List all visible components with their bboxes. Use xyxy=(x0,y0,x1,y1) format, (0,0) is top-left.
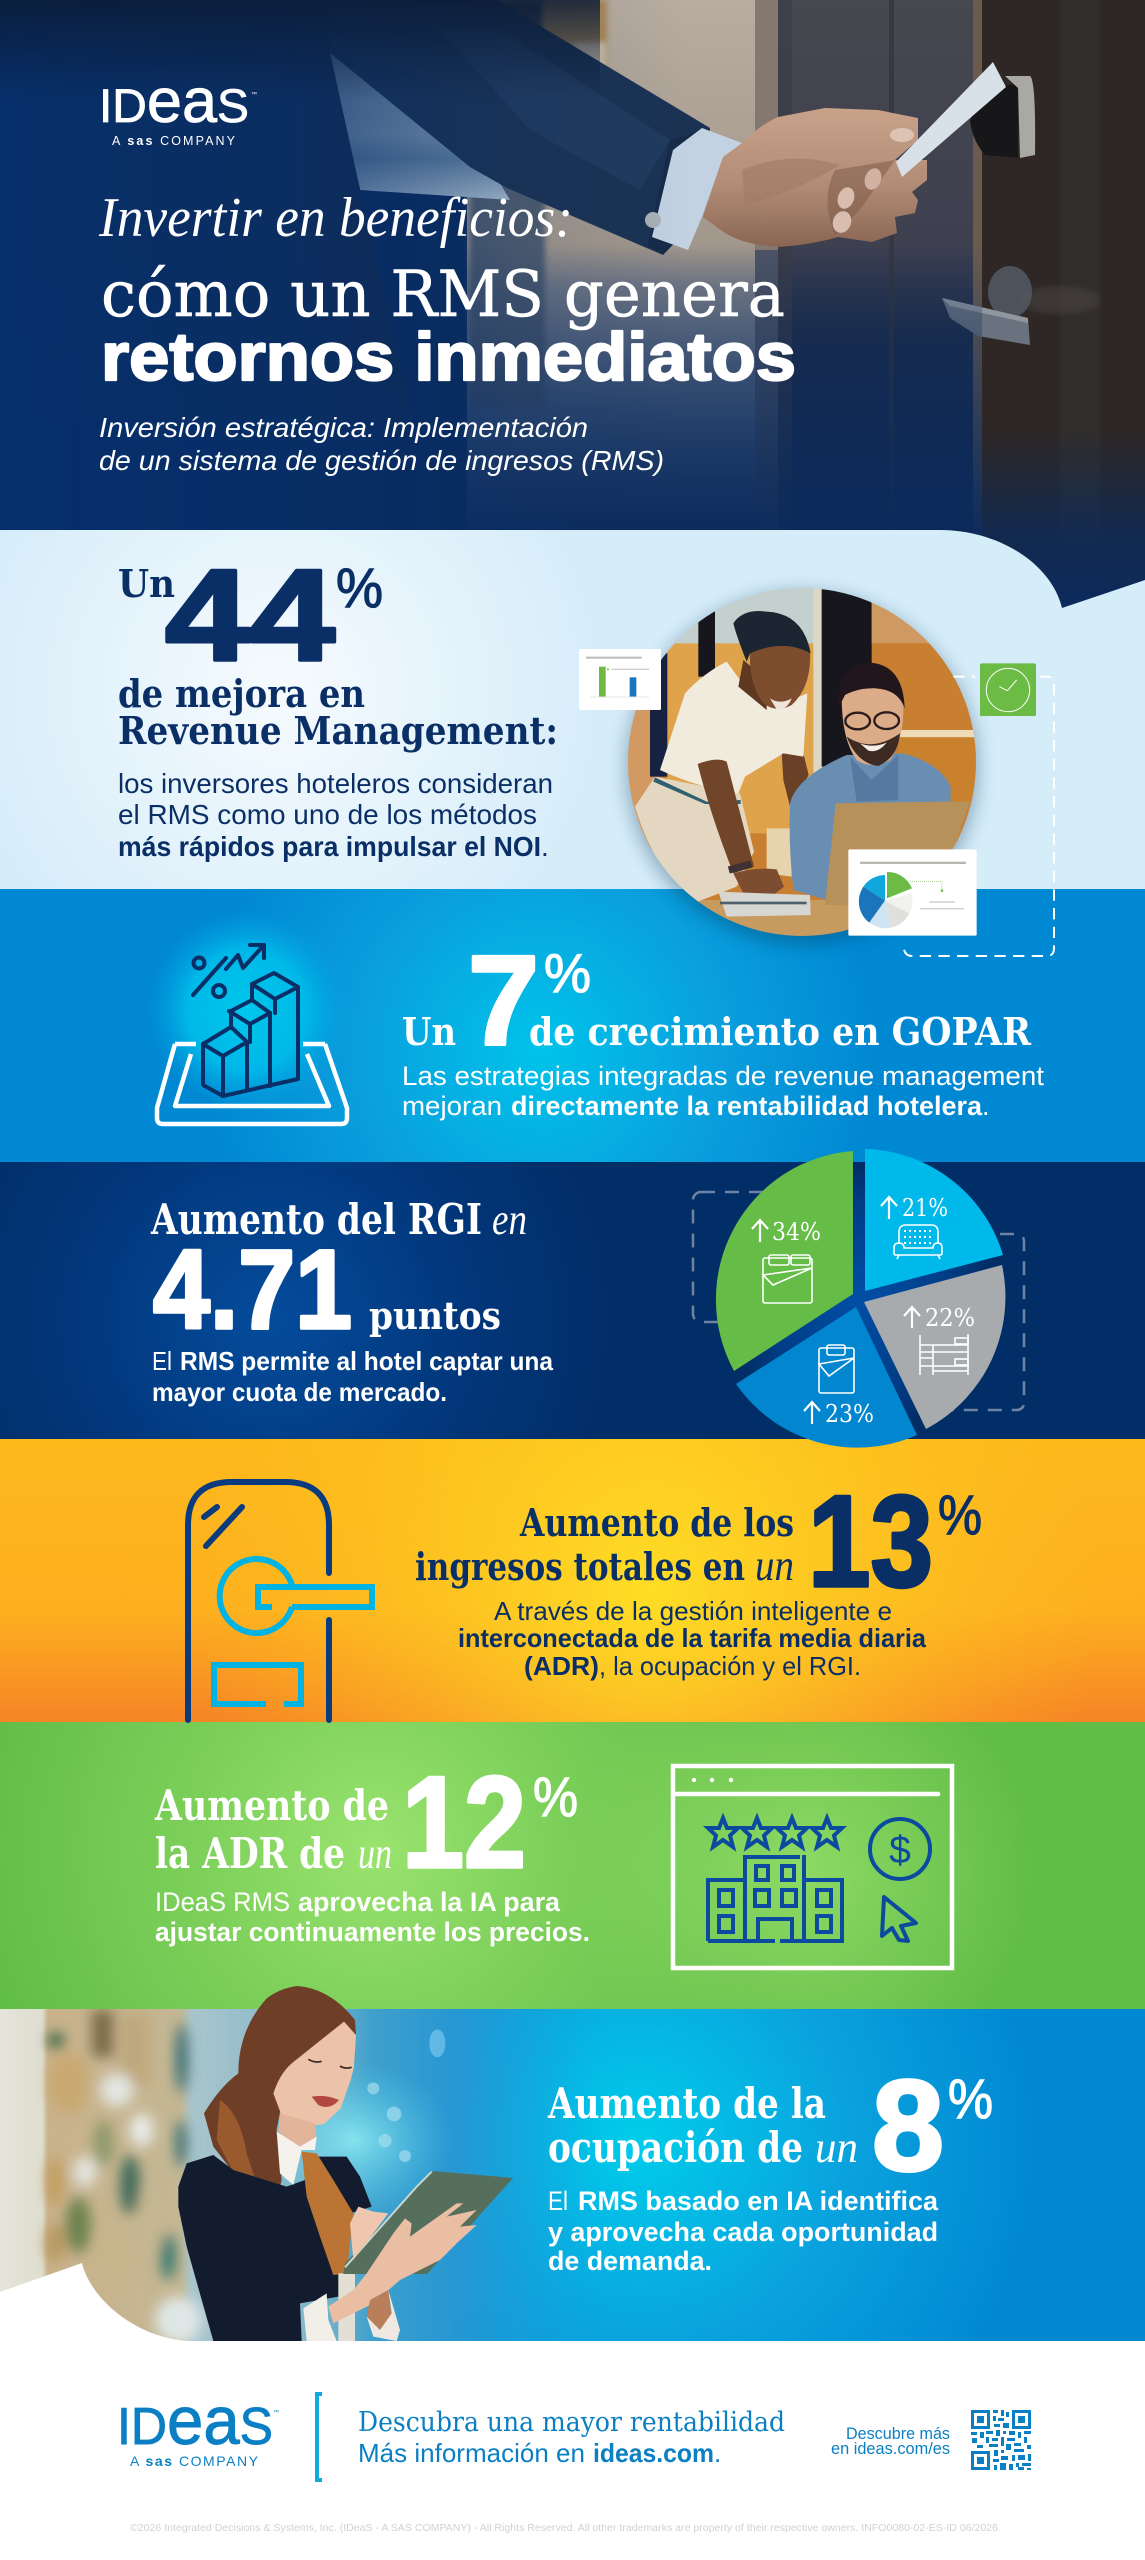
chart cards and dashed connector xyxy=(579,649,1054,956)
footer call to action: Más información en xyxy=(358,2438,585,2468)
QR label xyxy=(831,2425,950,2458)
text: 44 percent stat: % xyxy=(336,556,383,619)
text: RGI stat: puntos xyxy=(369,1293,501,1338)
title: cómo un RMS genera xyxy=(101,258,785,332)
hands xyxy=(328,2203,477,2323)
wrist xyxy=(367,2290,392,2330)
door lever xyxy=(988,266,1032,318)
table xyxy=(698,900,848,936)
woman right arm xyxy=(782,753,809,807)
background wall xyxy=(467,0,755,498)
panel: ADR xyxy=(0,1722,1145,2009)
text: RGI stat: 4.71 xyxy=(153,1227,352,1352)
text: 44 percent stat: los inversores hoteleros consideran xyxy=(118,768,553,799)
slice: 21%: 21% xyxy=(902,1194,948,1222)
text: 44 percent stat: Un xyxy=(118,561,175,606)
text: 8 percent stat: % xyxy=(948,2067,993,2130)
text: 7 percent stat: mejoran xyxy=(402,1091,502,1121)
text: 7 percent stat: Un xyxy=(402,1009,456,1054)
footer logo: A sas COMPANY xyxy=(130,2453,259,2469)
icon: cursor xyxy=(882,1897,916,1941)
subtitle xyxy=(99,412,664,476)
panel: total revenue xyxy=(0,1439,1145,1722)
QR label: Descubre más xyxy=(846,2425,950,2443)
door xyxy=(982,0,1145,612)
white corner curve xyxy=(0,2263,187,2341)
text: 13 percent stat: % xyxy=(938,1483,982,1546)
text: RGI stat: El xyxy=(152,1346,172,1376)
door frame xyxy=(755,0,778,250)
bracket divider xyxy=(317,2394,322,2480)
text: 8 percent stat: RMS basado en IA identifica xyxy=(578,2186,939,2216)
footer logo: ™ xyxy=(273,2409,279,2416)
tablet xyxy=(343,2171,513,2274)
text: 12 percent stat: Aumento de xyxy=(154,1781,389,1830)
chart: pie with room type increases xyxy=(693,1149,1024,1448)
text: 44 percent stat: de mejora en xyxy=(118,671,365,716)
scarf xyxy=(302,2152,353,2275)
title xyxy=(98,187,796,395)
footer call to action: Descubra una mayor rentabilidad xyxy=(358,2407,785,2438)
text: 8 percent stat: ocupación de xyxy=(548,2123,803,2172)
text: 8 percent stat: un xyxy=(815,2123,858,2172)
text: 7 percent stat: % xyxy=(544,942,591,1004)
text: 8 percent stat xyxy=(547,2054,993,2276)
slice: 34%: 34% xyxy=(772,1218,821,1246)
shirt strip xyxy=(338,2273,355,2341)
text: 8 percent stat: 8 xyxy=(872,2054,944,2198)
icon: dollar coin xyxy=(870,1819,930,1879)
text: 8 percent stat: y aprovecha cada oportunidad xyxy=(548,2217,938,2247)
photo: woman with tablet xyxy=(0,1986,600,2343)
slice: 22%: 22% xyxy=(925,1304,975,1332)
text: 13 percent stat: interconectada de la tarifa media diaria xyxy=(458,1623,927,1653)
subtitle: Inversión estratégica: Implementación xyxy=(99,412,588,443)
woman top xyxy=(660,662,807,793)
copyright line: ©2026 Integrated Decisions & Systems, Inc. (IDeaS - A SAS COMPANY) - All Rights Reserved. All other trademarks are property of their respective owners. INFO0080-02-ES-ID 06/2026 xyxy=(130,2522,998,2534)
hand xyxy=(703,108,927,247)
collar xyxy=(277,2132,317,2185)
text: 44 percent stat: 44 xyxy=(165,542,335,688)
slice: 22% xyxy=(864,1265,1005,1429)
text: 13 percent stat: , la ocupación y el RGI. xyxy=(599,1651,861,1681)
text: RGI stat: en xyxy=(492,1195,527,1244)
subtitle: de un sistema de gestión de ingresos (RMS) xyxy=(99,445,664,476)
text: 7 percent stat: Las estrategias integradas de revenue management xyxy=(402,1061,1045,1091)
text: 12 percent stat: 12 xyxy=(402,1749,526,1895)
text: 8 percent stat: de demanda. xyxy=(548,2246,712,2276)
man hair xyxy=(838,663,905,708)
footer call to action: . xyxy=(714,2438,721,2468)
text: 44 percent stat: . xyxy=(541,831,549,862)
icon: four stars xyxy=(708,1818,842,1847)
text: 13 percent stat: 13 xyxy=(808,1468,933,1614)
dashed connector xyxy=(903,677,1054,956)
QR code xyxy=(971,2410,1031,2470)
text: 44 percent stat xyxy=(118,542,558,862)
card reader xyxy=(970,83,1018,158)
woman left arm xyxy=(698,760,754,873)
panel: 44% revenue management xyxy=(0,530,1145,889)
text: RGI stat: RMS permite al hotel captar una xyxy=(180,1346,553,1376)
slice: 23%: 23% xyxy=(825,1400,874,1428)
laptop xyxy=(825,801,970,907)
man shirt xyxy=(790,753,951,900)
cuff xyxy=(652,128,742,250)
slice: 23% xyxy=(736,1307,917,1448)
text: 8 percent stat: El xyxy=(548,2186,568,2216)
woman neck and face xyxy=(738,660,767,710)
text: 12 percent stat: un xyxy=(358,1829,392,1878)
text: RGI stat: mayor cuota de mercado. xyxy=(152,1377,447,1407)
photo: two colleagues at laptop in circle xyxy=(620,580,987,947)
panel: occupancy xyxy=(0,2009,1145,2341)
man glasses xyxy=(845,712,899,729)
text: 13 percent stat: (ADR) xyxy=(524,1651,599,1681)
panel: hero photo header xyxy=(0,0,1145,612)
cuffs xyxy=(303,2293,337,2341)
text: 13 percent stat: ingresos totales en xyxy=(415,1544,745,1589)
text: 12 percent stat: ajustar continuamente los precios. xyxy=(155,1917,590,1947)
text: 13 percent stat: un xyxy=(755,1541,794,1590)
panel: RGI xyxy=(0,1162,1145,1439)
text: 7 percent stat: 7 xyxy=(468,929,539,1071)
text: 12 percent stat: % xyxy=(533,1765,578,1828)
text: 44 percent stat: más rápidos para impulsar el NOI xyxy=(118,831,541,862)
woman trousers xyxy=(635,777,754,903)
text: 13 percent stat xyxy=(415,1468,982,1681)
woman hair xyxy=(733,611,811,662)
icon: hotel building xyxy=(708,1855,842,1941)
icon: door handle xyxy=(188,1482,372,1720)
text: 13 percent stat: Aumento de los xyxy=(519,1500,794,1545)
logo: IDeaS header: ™ xyxy=(251,91,257,98)
text: 12 percent stat: IDeaS RMS xyxy=(155,1887,290,1917)
text: 7 percent stat xyxy=(402,929,1045,1121)
text: 12 percent stat xyxy=(154,1749,590,1947)
text: RGI stat: Aumento del RGI xyxy=(150,1195,482,1244)
text: 13 percent stat: A través de la gestión inteligente e xyxy=(494,1596,892,1626)
sleeve xyxy=(330,0,710,255)
jacket xyxy=(178,2155,372,2341)
text: 44 percent stat: el RMS como uno de los métodos xyxy=(118,799,537,830)
face xyxy=(273,2022,356,2127)
panel: 7% GOPAR xyxy=(0,889,1145,1162)
text: 12 percent stat: la ADR de xyxy=(155,1829,345,1878)
icon: dollar coin: $ xyxy=(889,1829,911,1872)
footer call to action: ideas.com xyxy=(593,2438,714,2468)
footer logo: IDeaS xyxy=(117,2383,273,2459)
slice: 34% xyxy=(716,1151,853,1371)
man face xyxy=(842,688,903,765)
text: 12 percent stat: aprovecha la IA para xyxy=(298,1887,561,1917)
footer call to action xyxy=(358,2407,785,2468)
overlays xyxy=(467,262,982,536)
text: RGI stat xyxy=(150,1195,553,1407)
title: Invertir en beneficios: xyxy=(98,187,573,249)
key card xyxy=(896,62,1006,177)
text: 7 percent stat: de crecimiento en GOPAR xyxy=(529,1009,1031,1054)
text: 44 percent stat: Revenue Management: xyxy=(118,708,558,753)
icon: browser window with hotel rating xyxy=(673,1766,952,1968)
torso xyxy=(332,0,499,306)
QR label: en ideas.com/es xyxy=(831,2440,950,2458)
logo: IDeaS header: A sas COMPANY xyxy=(112,134,236,148)
icon: growth chart on tablet xyxy=(147,910,347,1124)
logo: IDeaS header: IDeaS xyxy=(99,67,249,136)
slice: 21% xyxy=(865,1149,1003,1291)
text: 7 percent stat: . xyxy=(982,1091,990,1121)
notebooks xyxy=(718,892,811,917)
text: 7 percent stat: directamente la rentabilidad hotelera xyxy=(511,1091,983,1121)
hair xyxy=(204,1986,356,2270)
cufflink xyxy=(645,212,661,228)
gap behind arm xyxy=(330,53,510,200)
icon: bar chart card xyxy=(579,649,661,710)
icon: pie chart card xyxy=(848,849,977,936)
text: 8 percent stat: Aumento de la xyxy=(547,2079,826,2128)
title: retornos inmediatos xyxy=(101,319,796,395)
icon: clock xyxy=(980,663,1036,716)
